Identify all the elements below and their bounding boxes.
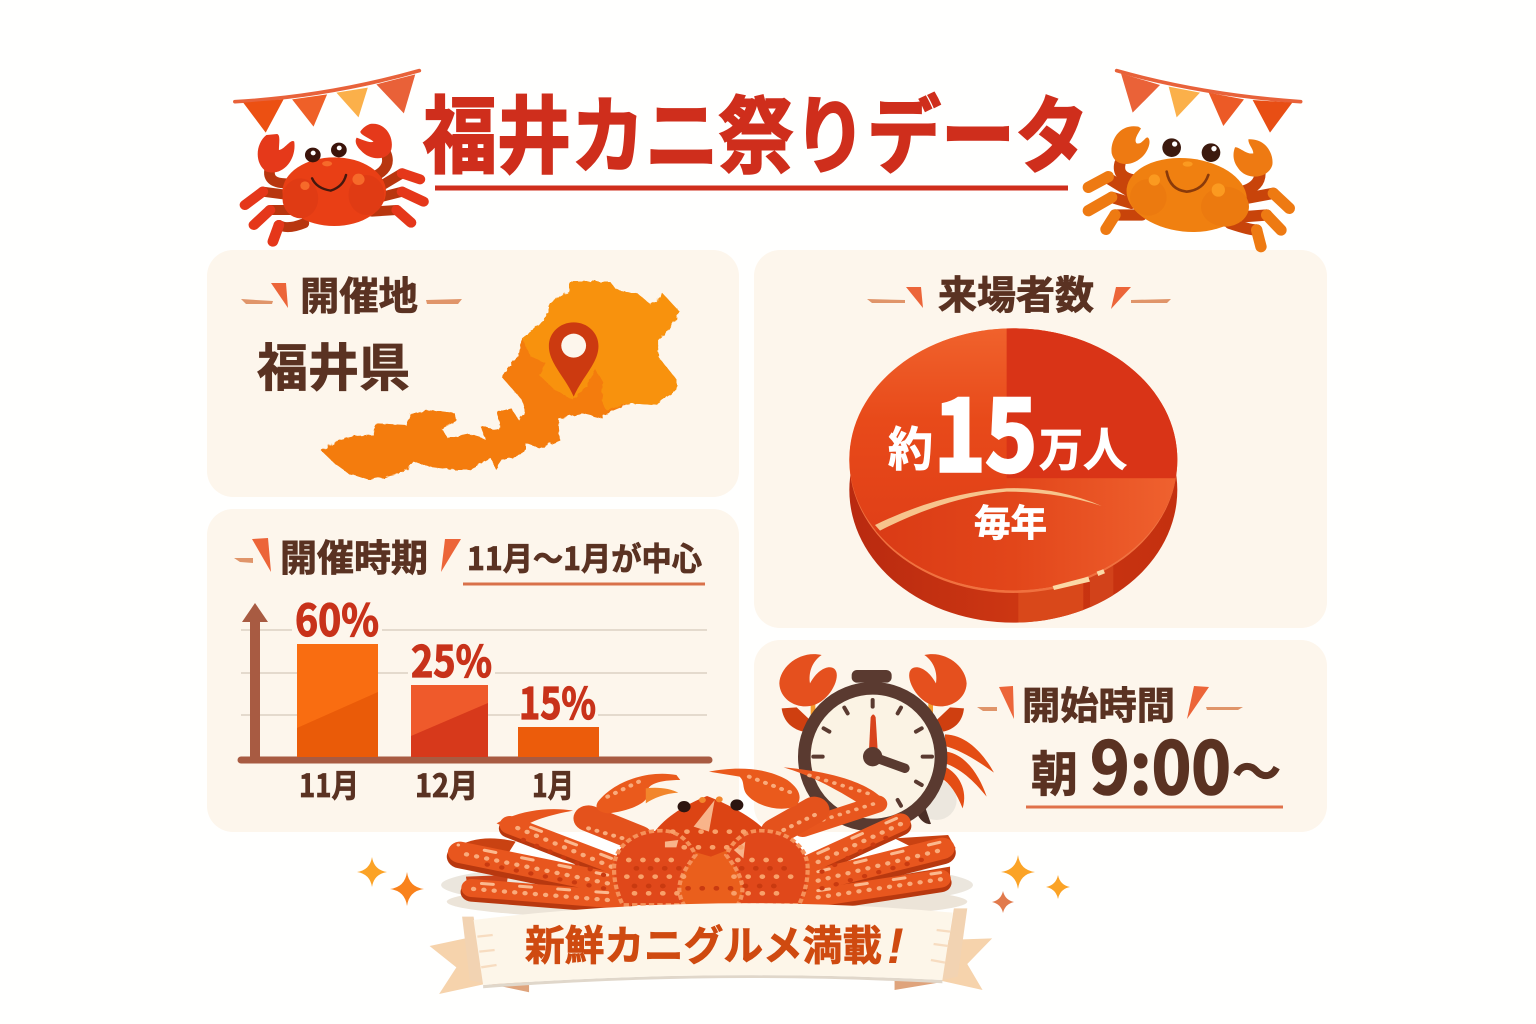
left crab and bunting [235,71,423,242]
start-time value: 9:00 [1090,710,1231,815]
visitors disc chart [840,323,1187,627]
bar: November [297,644,378,757]
value 15%: 15% [519,670,596,732]
bar chart [241,585,709,807]
map pin [549,322,598,397]
season summary: 11月〜1月が中心 [467,534,702,580]
venue heading ornaments [241,283,462,308]
banner text: 新鮮カニグルメ満載 [525,912,882,972]
value 60%: 60% [295,585,379,649]
alarm clock with crab claws [779,654,994,825]
value: 15: 15 [934,358,1037,500]
snow crab [441,767,973,920]
panel: start time [754,640,1327,832]
banner [430,903,992,994]
visitors heading ornaments [867,287,1171,309]
start-time heading: 開始時間 [1022,675,1175,730]
start-time tilde: 〜 [1232,733,1281,805]
bunting left [235,71,419,133]
back leg hooks [456,809,956,888]
label 12月: 12月 [415,761,478,807]
season heading: 開催時期 [280,528,428,582]
label 11月: 11月 [299,761,359,807]
axis [241,603,709,760]
title: 福井カニ祭りデータ [423,70,1089,191]
bunting right [1117,71,1301,133]
season heading ornaments [234,538,461,572]
snow crab and banner [430,767,992,994]
left claw [588,774,680,842]
value: unit: 万人 [1039,414,1127,480]
banner exclamation: ! [887,918,904,974]
value: annual: 毎年 [974,493,1047,547]
start-time heading ornaments [977,686,1243,719]
venue heading: 開催地 [300,266,418,322]
bar: January [518,727,599,757]
label 1月: 1月 [532,761,574,807]
panel: visitors [754,250,1327,628]
panel: venue [207,250,739,497]
sparkles left [357,857,424,906]
value 25%: 25% [411,628,492,690]
right crab and bunting [1088,71,1301,247]
visitors heading: 来場者数 [938,265,1094,321]
bar: December [411,685,488,757]
title underline [435,186,1068,190]
map of Fukui [321,282,679,480]
right claw [709,769,818,832]
upper-right long leg [784,767,887,828]
sparkles right [992,855,1070,913]
crab carapace [614,796,808,905]
venue name: 福井県 [257,327,410,401]
legs [460,826,942,904]
start-time morning: 朝 [1031,735,1078,805]
value: about: 約 [888,411,933,480]
panel: season [207,509,739,832]
